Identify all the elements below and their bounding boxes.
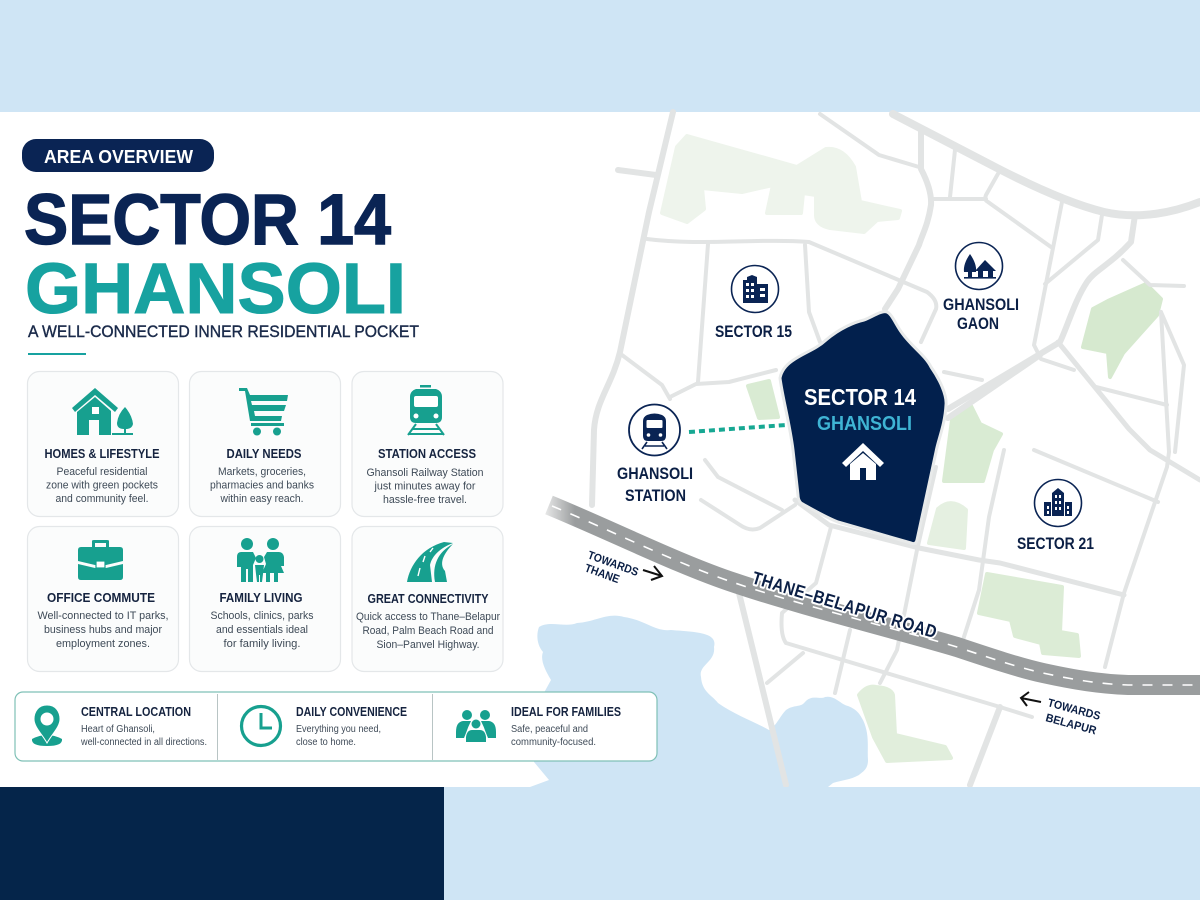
water body — [530, 616, 868, 787]
marker: ghansoli station: GHANSOLI — [617, 465, 693, 483]
direction: towards thane: TOWARDS — [586, 550, 640, 579]
marker: sector 15 — [715, 266, 792, 341]
marker: ghansoli gaon — [943, 242, 1019, 333]
highlight: ideal for families — [456, 705, 621, 748]
highlight: daily convenience: Everything you need, — [296, 724, 381, 735]
marker: sector 21 — [1017, 480, 1094, 553]
highlight: ideal for families: Safe, peaceful and — [511, 724, 588, 735]
icon: family — [237, 538, 284, 582]
top band — [0, 0, 1200, 112]
highlight: daily convenience — [242, 705, 407, 748]
marker: ghansoli station — [617, 404, 693, 505]
icon: clock — [242, 706, 280, 746]
white canvas — [0, 112, 1200, 787]
card: homes and lifestyle — [28, 372, 178, 516]
card: homes and lifestyle: HOMES & LIFESTYLE — [44, 447, 160, 461]
highlight: ideal for families: community-focused. — [511, 737, 596, 748]
card: office commute: business hubs and major — [44, 624, 162, 636]
title: GHANSOLI — [25, 250, 406, 329]
card: great connectivity: Quick access to Thane–Belapur — [356, 611, 500, 623]
highlight: central location — [32, 705, 207, 748]
card: daily needs: DAILY NEEDS — [226, 447, 302, 461]
card: station access: STATION ACCESS — [378, 447, 476, 461]
card: station access: Ghansoli Railway Station — [366, 467, 484, 479]
title — [24, 181, 406, 329]
panel: key highlights — [15, 692, 657, 761]
direction: towards thane — [583, 550, 662, 586]
card: daily needs: pharmacies and banks — [210, 480, 314, 492]
marker: sector 21: SECTOR 21 — [1017, 535, 1094, 553]
ghansoli label: GHANSOLI — [817, 413, 912, 435]
marker: ghansoli gaon: GHANSOLI — [943, 296, 1019, 314]
icon: briefcase — [78, 540, 123, 580]
title: SECTOR 14 — [24, 181, 391, 260]
icon: train — [408, 385, 444, 435]
icon: shopping cart — [239, 388, 288, 436]
card: family living: and essentials ideal — [216, 624, 308, 636]
highlight: daily convenience: close to home. — [296, 737, 356, 748]
card: homes and lifestyle: zone with green pockets — [46, 480, 158, 492]
marker: ghansoli gaon: GAON — [957, 315, 999, 333]
card: daily needs: Markets, groceries, — [218, 466, 306, 478]
card: family living: for family living. — [224, 638, 300, 650]
icon: house and tree — [72, 388, 133, 435]
marker: sector 15: SECTOR 15 — [715, 323, 792, 341]
dotted link: station to sector 14 — [689, 425, 786, 432]
highway: Thane-Belapur Road — [549, 505, 1200, 685]
bottom band — [0, 787, 1200, 900]
sector 14 highlighted area — [780, 312, 946, 544]
card: great connectivity: GREAT CONNECTIVITY — [368, 592, 489, 606]
direction: towards thane: THANE — [583, 563, 621, 586]
street network — [592, 112, 1200, 785]
direction: towards belapur: BELAPUR — [1044, 712, 1098, 738]
card: station access: just minutes away for — [374, 480, 476, 492]
icon: location pin — [32, 705, 62, 746]
card: daily needs: within easy reach. — [220, 493, 304, 505]
card: office commute: Well-connected to IT parks, — [38, 610, 168, 622]
highlight: central location: well-connected in all directions. — [80, 737, 207, 748]
card: homes and lifestyle: Peaceful residential — [56, 466, 148, 478]
badge: area overview: AREA OVERVIEW — [44, 146, 194, 167]
direction: towards belapur — [1021, 692, 1102, 738]
subtitle: A WELL-CONNECTED INNER RESIDENTIAL POCKET — [28, 322, 419, 341]
highlight: daily convenience: DAILY CONVENIENCE — [296, 705, 407, 719]
marker: ghansoli station: STATION — [625, 487, 686, 505]
direction: towards belapur: TOWARDS — [1046, 697, 1102, 723]
card: station access: hassle-free travel. — [383, 494, 467, 506]
card: office commute: employment zones. — [56, 638, 150, 650]
card: station access — [352, 372, 503, 516]
card: great connectivity — [352, 526, 503, 672]
icon: home — [842, 443, 884, 480]
map — [530, 112, 1200, 787]
highlight: ideal for families: IDEAL FOR FAMILIES — [511, 705, 621, 719]
card: family living — [190, 526, 340, 672]
highlight: central location: CENTRAL LOCATION — [81, 705, 191, 719]
card: great connectivity: Road, Palm Beach Road and — [362, 625, 494, 637]
highlight: central location: Heart of Ghansoli, — [81, 724, 155, 735]
icon: road — [407, 542, 453, 582]
sector 14 label: SECTOR 14 — [804, 384, 916, 410]
card: office commute — [28, 526, 178, 672]
card: office commute: OFFICE COMMUTE — [47, 591, 155, 605]
card: homes and lifestyle: and community feel. — [56, 493, 148, 505]
road label: THANE–BELAPUR ROAD — [750, 568, 939, 642]
icon: group of people — [456, 710, 496, 742]
parks — [662, 136, 1161, 761]
badge: area overview — [22, 139, 214, 172]
card: great connectivity: Sion–Panvel Highway. — [376, 639, 480, 651]
card: family living: Schools, clinics, parks — [210, 610, 314, 622]
card: daily needs — [190, 372, 340, 516]
card: family living: FAMILY LIVING — [220, 591, 302, 605]
